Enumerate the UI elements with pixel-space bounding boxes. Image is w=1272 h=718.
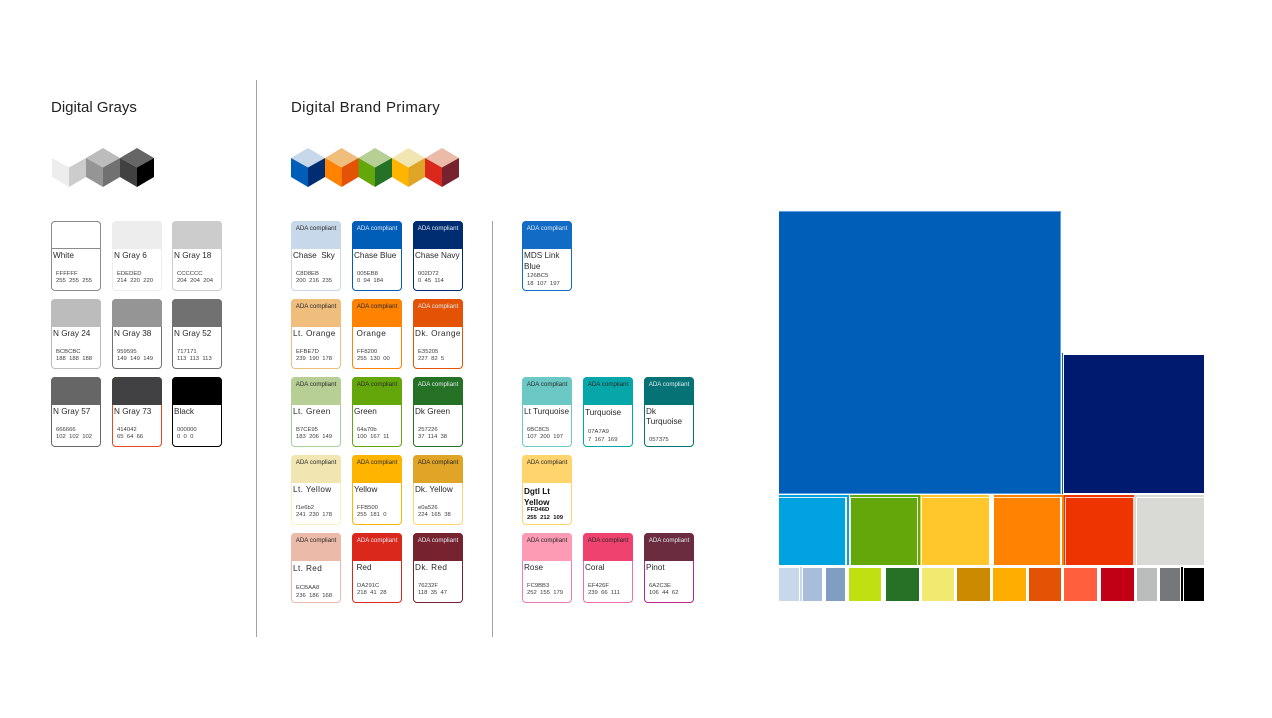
card: Pinot — [644, 533, 694, 603]
card: Lt. Orange: 239 190 178 — [296, 356, 332, 362]
card: Red: ADA compliant — [357, 537, 397, 544]
card: Dk. Red: Dk. Red — [415, 563, 447, 572]
heading: Digital Grays: Digital Grays — [51, 99, 137, 116]
card: Chase Navy: 0 45 114 — [418, 278, 444, 284]
card: Dgtl Lt Yellow: 255 212 109 — [527, 515, 563, 521]
card: Rose: 252 155 179 — [527, 590, 563, 596]
card: Lt. Yellow: f1e6b2 — [296, 505, 314, 511]
card: Lt. Yellow: ADA compliant — [296, 459, 336, 466]
card: Pinot: 6A2C3E — [649, 583, 671, 589]
card: Dk. Yellow — [413, 455, 463, 525]
card: Lt Turquoise: 107 200 197 — [527, 434, 563, 440]
card: Dk Green: 37 114 38 — [418, 434, 447, 440]
card: Lt Turquoise: Lt Turquoise — [524, 407, 569, 416]
card: Pinot: Pinot — [646, 563, 665, 572]
card: MDS Link Blue — [522, 221, 572, 291]
card: Chase Navy: 002D72 — [418, 271, 439, 277]
card: Coral — [583, 533, 633, 603]
card: Lt Turquoise: ADA compliant — [527, 381, 567, 388]
card: Rose — [522, 533, 572, 603]
card: Green: 64a70b — [357, 427, 377, 433]
card: Lt. Green: ADA compliant — [296, 381, 336, 388]
card: N Gray 73: 65 64 66 — [117, 434, 143, 440]
card: Dk Turquoise: Dk Turquoise — [646, 406, 682, 426]
card: Chase Navy — [413, 221, 463, 291]
card: Dk. Yellow: ADA compliant — [418, 459, 458, 466]
treemap block: Green — [850, 495, 920, 565]
card: Coral: 239 66 111 — [588, 590, 620, 596]
card: N Gray 18: N Gray 18 — [174, 251, 211, 260]
card: Lt. Red: 236 186 168 — [296, 593, 332, 599]
card: Chase Sky: ADA compliant — [296, 225, 336, 232]
card: Turquoise — [583, 377, 633, 447]
card: Chase Blue: ADA compliant — [357, 225, 397, 232]
card: N Gray 38: N Gray 38 — [114, 329, 151, 338]
card: N Gray 24: BCBCBC — [56, 349, 81, 355]
card: N Gray 6: EDEDED — [117, 271, 142, 277]
treemap row: small swatches — [779, 567, 1204, 601]
treemap block: Chase Blue — [779, 211, 1061, 494]
card: Lt. Red: ECBAA8 — [296, 585, 319, 591]
card: N Gray 6 — [112, 221, 162, 291]
card: Lt. Yellow: 241 230 178 — [296, 512, 332, 518]
card: MDS Link Blue: MDS Link Blue — [524, 251, 560, 270]
card: Lt. Red — [291, 533, 341, 603]
card: Coral: EF426F — [588, 583, 609, 589]
card: Green: Green — [354, 407, 377, 416]
card: Dk. Red — [413, 533, 463, 603]
card: Turquoise: 7 167 169 — [588, 437, 617, 443]
card: Rose: FC9BB3 — [527, 583, 549, 589]
card: N Gray 24: N Gray 24 — [53, 329, 90, 338]
card: Dgtl Lt Yellow: ADA compliant — [527, 459, 567, 466]
card: Turquoise: Turquoise — [585, 408, 621, 417]
card: White: FFFFFF — [56, 271, 78, 277]
card: Black — [172, 377, 222, 447]
card: Chase Sky — [291, 221, 341, 291]
card: Yellow: 255 181 0 — [357, 512, 386, 518]
card: Lt. Orange — [291, 299, 341, 369]
treemap block: Navy — [1062, 353, 1204, 494]
card: N Gray 24 — [51, 299, 101, 369]
card: N Gray 57: 102 102 102 — [56, 434, 92, 440]
treemap block: Light gray — [1134, 495, 1204, 565]
card: MDS Link Blue: 18 107 197 — [527, 281, 560, 287]
card: Dk. Red: 118 35 47 — [418, 590, 447, 596]
card: Yellow: FFB500 — [357, 505, 378, 511]
card: White — [51, 221, 101, 291]
card: Lt. Red: ADA compliant — [296, 537, 336, 544]
card: Lt. Green: 183 206 149 — [296, 434, 332, 440]
card: N Gray 38 — [112, 299, 162, 369]
icon: brand color cubes — [291, 148, 459, 187]
heading: Digital Brand Primary: Digital Brand Primary — [291, 99, 440, 116]
treemap block: Orange — [994, 495, 1064, 565]
card: Black: Black — [174, 407, 194, 416]
card: Chase Blue: 0 94 184 — [357, 278, 383, 284]
treemap block: Red-orange — [1064, 495, 1134, 565]
card: Dk. Red: ADA compliant — [418, 537, 458, 544]
card: Black: 000000 — [177, 427, 197, 433]
card: Dk. Yellow: e0a526 — [418, 505, 438, 511]
card: Chase Sky: Chase Sky — [293, 251, 335, 260]
card: Dk. Orange: Dk. Orange — [415, 329, 461, 338]
card: Rose: ADA compliant — [527, 537, 567, 544]
card: Rose: Rose — [524, 563, 543, 572]
card: N Gray 6: 214 220 220 — [117, 278, 153, 284]
card: Red — [352, 533, 402, 603]
card: Orange: FF8200 — [357, 349, 377, 355]
card: Lt Turquoise: 6BC8C5 — [527, 427, 549, 433]
card: N Gray 52: N Gray 52 — [174, 329, 211, 338]
card: N Gray 18: 204 204 204 — [177, 278, 213, 284]
card: N Gray 52: 113 113 113 — [177, 356, 212, 362]
card: Chase Blue: Chase Blue — [354, 251, 396, 260]
card: N Gray 24: 188 188 188 — [56, 356, 92, 362]
card: Orange — [352, 299, 402, 369]
card: Lt. Red: Lt. Red — [293, 564, 322, 573]
card: Dk Green: 257226 — [418, 427, 438, 433]
card: N Gray 57: 666666 — [56, 427, 76, 433]
card: Dk. Red: 76232F — [418, 583, 438, 589]
card: N Gray 57 — [51, 377, 101, 447]
card: Chase Navy: Chase Navy — [415, 251, 460, 260]
card: Pinot: ADA compliant — [649, 537, 689, 544]
card: Chase Navy: ADA compliant — [418, 225, 458, 232]
treemap block: Cyan — [779, 495, 849, 565]
card: N Gray 18: CCCCCC — [177, 271, 203, 277]
card: White: 255 255 255 — [56, 278, 92, 284]
card: Lt. Green: Lt. Green — [293, 407, 331, 416]
card: N Gray 38: 149 149 149 — [117, 356, 153, 362]
card: Red: DA291C — [357, 583, 379, 589]
card: Turquoise: ADA compliant — [588, 381, 628, 388]
card: N Gray 18 — [172, 221, 222, 291]
card: Lt. Yellow: Lt. Yellow — [293, 485, 332, 494]
card: Lt. Green: B7CE95 — [296, 427, 318, 433]
card: Yellow — [352, 455, 402, 525]
card: Dgtl Lt Yellow: Dgtl Lt Yellow — [524, 486, 550, 506]
card: Dk. Yellow: 224 165 38 — [418, 512, 451, 518]
card: N Gray 52: 717171 — [177, 349, 197, 355]
card: Dgtl Lt Yellow — [522, 455, 572, 525]
card: N Gray 57: N Gray 57 — [53, 407, 90, 416]
card: Red: Red — [356, 563, 372, 572]
card: Chase Sky: 200 216 235 — [296, 278, 332, 284]
card: N Gray 73 — [112, 377, 162, 447]
card: Dk Green: Dk Green — [415, 407, 450, 416]
card: Dk Turquoise: 057375 — [649, 437, 669, 443]
card: Yellow: ADA compliant — [357, 459, 397, 466]
card: Chase Blue — [352, 221, 402, 291]
card: Lt. Orange: ADA compliant — [296, 303, 336, 310]
card: Dk Green — [413, 377, 463, 447]
card: Dk. Orange — [413, 299, 463, 369]
card: MDS Link Blue: ADA compliant — [527, 225, 567, 232]
card: Coral: Coral — [585, 563, 605, 572]
card: Orange: 255 130 00 — [357, 356, 390, 362]
card: N Gray 73: N Gray 73 — [114, 407, 151, 416]
card: Dk. Orange: ADA compliant — [418, 303, 458, 310]
card: Black: 0 0 0 — [177, 434, 193, 440]
card: Lt. Orange: Lt. Orange — [293, 329, 336, 338]
card: Dk Green: ADA compliant — [418, 381, 458, 388]
card: Dk. Orange: 227 82 5 — [418, 356, 444, 362]
card: Lt Turquoise — [522, 377, 572, 447]
card: Green — [352, 377, 402, 447]
card: Yellow: Yellow — [354, 485, 377, 494]
card: Dk Turquoise — [644, 377, 694, 447]
card: Coral: ADA compliant — [588, 537, 628, 544]
treemap block: Yellow — [920, 495, 989, 565]
card: Lt. Orange: EFBE7D — [296, 349, 319, 355]
card: N Gray 38: 959595 — [117, 349, 137, 355]
card: Green: 100 167 11 — [357, 434, 389, 440]
card: Lt. Green — [291, 377, 341, 447]
card: N Gray 6: N Gray 6 — [114, 251, 147, 260]
card: Chase Sky: C8D8EB — [296, 271, 319, 277]
card: Red: 218 41 28 — [357, 590, 386, 596]
card: N Gray 52 — [172, 299, 222, 369]
card: Pinot: 106 44 62 — [649, 590, 678, 596]
card: Lt. Yellow — [291, 455, 341, 525]
card: Orange: Orange — [356, 329, 386, 338]
card: Dk Turquoise: ADA compliant — [649, 381, 689, 388]
card: Chase Blue: 005EB8 — [357, 271, 378, 277]
card: Dgtl Lt Yellow: FFD46D — [527, 507, 549, 513]
card: Turquoise: 07A7A9 — [588, 429, 609, 435]
card: Green: ADA compliant — [357, 381, 397, 388]
card: N Gray 73: 414042 — [117, 427, 137, 433]
card: Orange: ADA compliant — [357, 303, 397, 310]
icon: gray cubes — [52, 148, 154, 187]
card: MDS Link Blue: 126BC5 — [527, 273, 548, 279]
card: White: White — [53, 251, 74, 260]
card: Dk. Yellow: Dk. Yellow — [415, 485, 453, 494]
card: Dk. Orange: E35205 — [418, 349, 438, 355]
